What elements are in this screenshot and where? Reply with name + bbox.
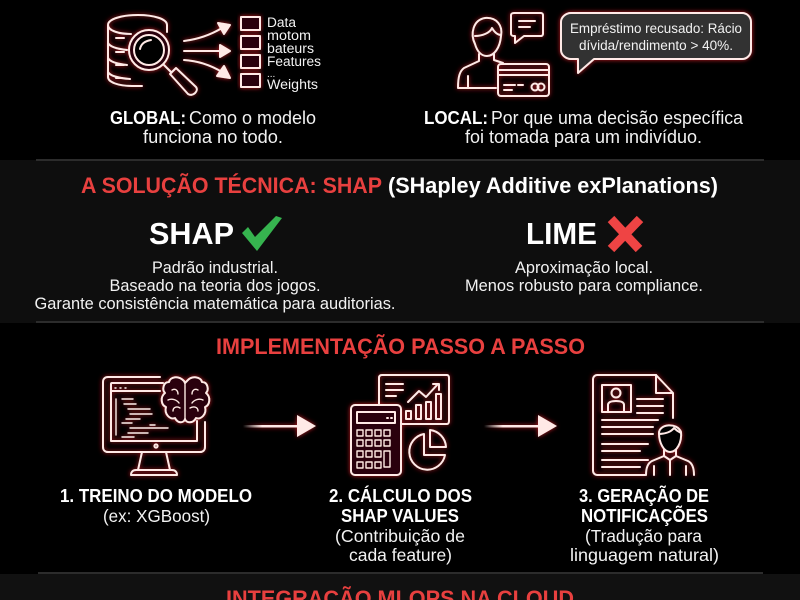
local caption: LOCAL: bbox=[424, 108, 488, 128]
LIME column: Aproximação local. bbox=[515, 258, 653, 277]
label: step 1: (ex: XGBoost) bbox=[103, 506, 210, 526]
label: step 3: (Tradução para bbox=[585, 526, 702, 546]
label: step 2: SHAP VALUES bbox=[341, 506, 459, 526]
label: step 3 bbox=[570, 485, 719, 565]
local caption: Por que uma decisão específica bbox=[491, 108, 744, 128]
step 2: SHAP values bbox=[329, 375, 472, 565]
icon: monitor with code and brain bbox=[103, 377, 209, 475]
icon: red cross bbox=[611, 219, 640, 249]
SHAP column: Baseado na teoria dos jogos. bbox=[110, 276, 320, 295]
heading: technical solution bbox=[81, 173, 718, 198]
heading: technical solution: (SHapley Additive exPlanations) bbox=[388, 173, 718, 198]
heading: step by step: IMPLEMENTAÇÃO PASSO A PASSO bbox=[216, 334, 585, 359]
feature labels: Weights bbox=[267, 77, 318, 92]
feature labels bbox=[267, 15, 321, 92]
panel: global explanation bbox=[108, 15, 321, 147]
label: step 2: 2. CÁLCULO DOS bbox=[329, 485, 472, 506]
arrow: step 1 to 2 bbox=[243, 415, 316, 437]
local caption: foi tomada para um indivíduo. bbox=[465, 127, 702, 147]
icon: output arrows bbox=[184, 23, 230, 78]
LIME column: LIME bbox=[526, 216, 597, 251]
label: step 2 bbox=[329, 485, 472, 565]
feature labels: bateurs bbox=[267, 41, 314, 56]
LIME column: Menos robusto para compliance. bbox=[465, 276, 703, 295]
global caption: Como o modelo bbox=[189, 108, 316, 128]
SHAP column: SHAP bbox=[149, 216, 234, 251]
panel: MLOps integration bbox=[0, 572, 800, 600]
icon: feature checkboxes bbox=[241, 17, 260, 87]
arrow: step 2 to 3 bbox=[484, 415, 557, 437]
panel: local explanation bbox=[424, 13, 751, 147]
label: step 3: linguagem natural) bbox=[570, 545, 719, 565]
label: step 3: NOTIFICAÇÕES bbox=[581, 505, 708, 526]
feature labels: Features bbox=[267, 54, 321, 69]
icon: person with chat and credit card bbox=[458, 13, 549, 96]
label: step 1: 1. TREINO DO MODELO bbox=[60, 486, 252, 506]
SHAP column: Padrão industrial. bbox=[152, 258, 278, 277]
icon: document with person bbox=[593, 375, 694, 475]
label: step 3: 3. GERAÇÃO DE bbox=[579, 485, 709, 506]
feature labels: ... bbox=[267, 69, 275, 80]
heading: technical solution: A SOLUÇÃO TÉCNICA: SHAP bbox=[81, 173, 382, 198]
label: step 1 bbox=[60, 486, 252, 526]
label: step 2: cada feature) bbox=[349, 545, 452, 565]
global caption: GLOBAL: bbox=[110, 108, 186, 128]
icon: database with magnifier bbox=[108, 15, 197, 95]
panel: technical solution bbox=[0, 159, 800, 323]
global caption bbox=[110, 108, 316, 147]
feature labels: Data bbox=[267, 15, 296, 30]
step 1: model training bbox=[60, 377, 252, 526]
feature labels: motom bbox=[267, 28, 311, 43]
speech bubble: rejection reason: Empréstimo recusado: Rácio bbox=[570, 21, 742, 36]
speech bubble: rejection reason bbox=[561, 13, 751, 73]
speech bubble: rejection reason: dívida/rendimento > 40%. bbox=[579, 38, 733, 53]
global caption: funciona no todo. bbox=[143, 127, 283, 147]
SHAP column bbox=[34, 216, 396, 313]
LIME column bbox=[465, 216, 703, 295]
label: step 2: (Contribuição de bbox=[335, 526, 465, 546]
icon: calculator, chart and pie bbox=[351, 375, 449, 475]
icon: green check bbox=[242, 216, 282, 251]
step 3: notifications bbox=[570, 375, 719, 565]
SHAP column: Garante consistência matemática para auditorias. bbox=[34, 294, 396, 313]
local caption bbox=[424, 108, 744, 147]
